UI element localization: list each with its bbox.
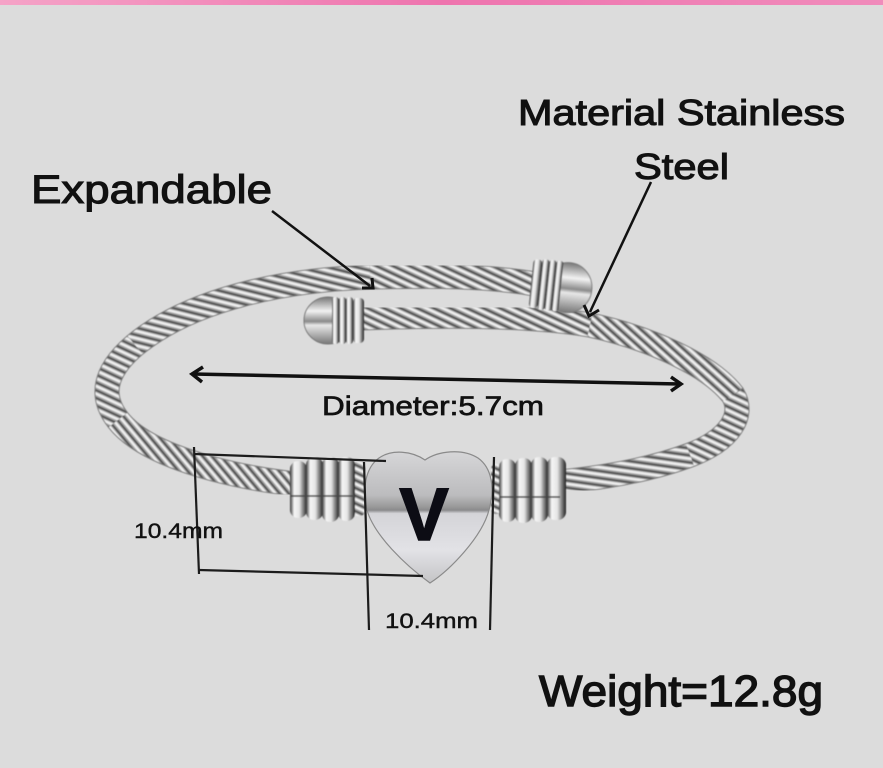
right end cap (528, 258, 594, 315)
label: Expandable: Expandable (31, 168, 272, 212)
label: Material Stainless Steel: Material Stainless (518, 92, 845, 133)
label: height 10.4mm: 10.4mm (134, 520, 223, 543)
left end cap (304, 297, 364, 344)
dimension lines: heart width (364, 457, 494, 630)
left bead stack (290, 457, 365, 522)
letter V: V (399, 473, 449, 556)
label: Material Stainless Steel (518, 92, 845, 187)
label: width 10.4mm: 10.4mm (385, 610, 478, 633)
bracelet (107, 258, 737, 583)
right bead stack (491, 457, 566, 523)
label: weight: Weight=12.8g (539, 667, 823, 716)
label: diameter: Diameter:5.7cm (322, 391, 544, 421)
top pink bar (0, 0, 883, 5)
label: Material Stainless Steel: Steel (634, 146, 729, 187)
dimension lines: heart height (194, 447, 423, 576)
upper cable strand (107, 276, 535, 484)
heart charm (365, 452, 492, 583)
lower cable strand (360, 316, 737, 482)
arrow: diameter (192, 367, 681, 391)
arrow: material (584, 182, 651, 316)
arrow: expandable (272, 211, 373, 288)
